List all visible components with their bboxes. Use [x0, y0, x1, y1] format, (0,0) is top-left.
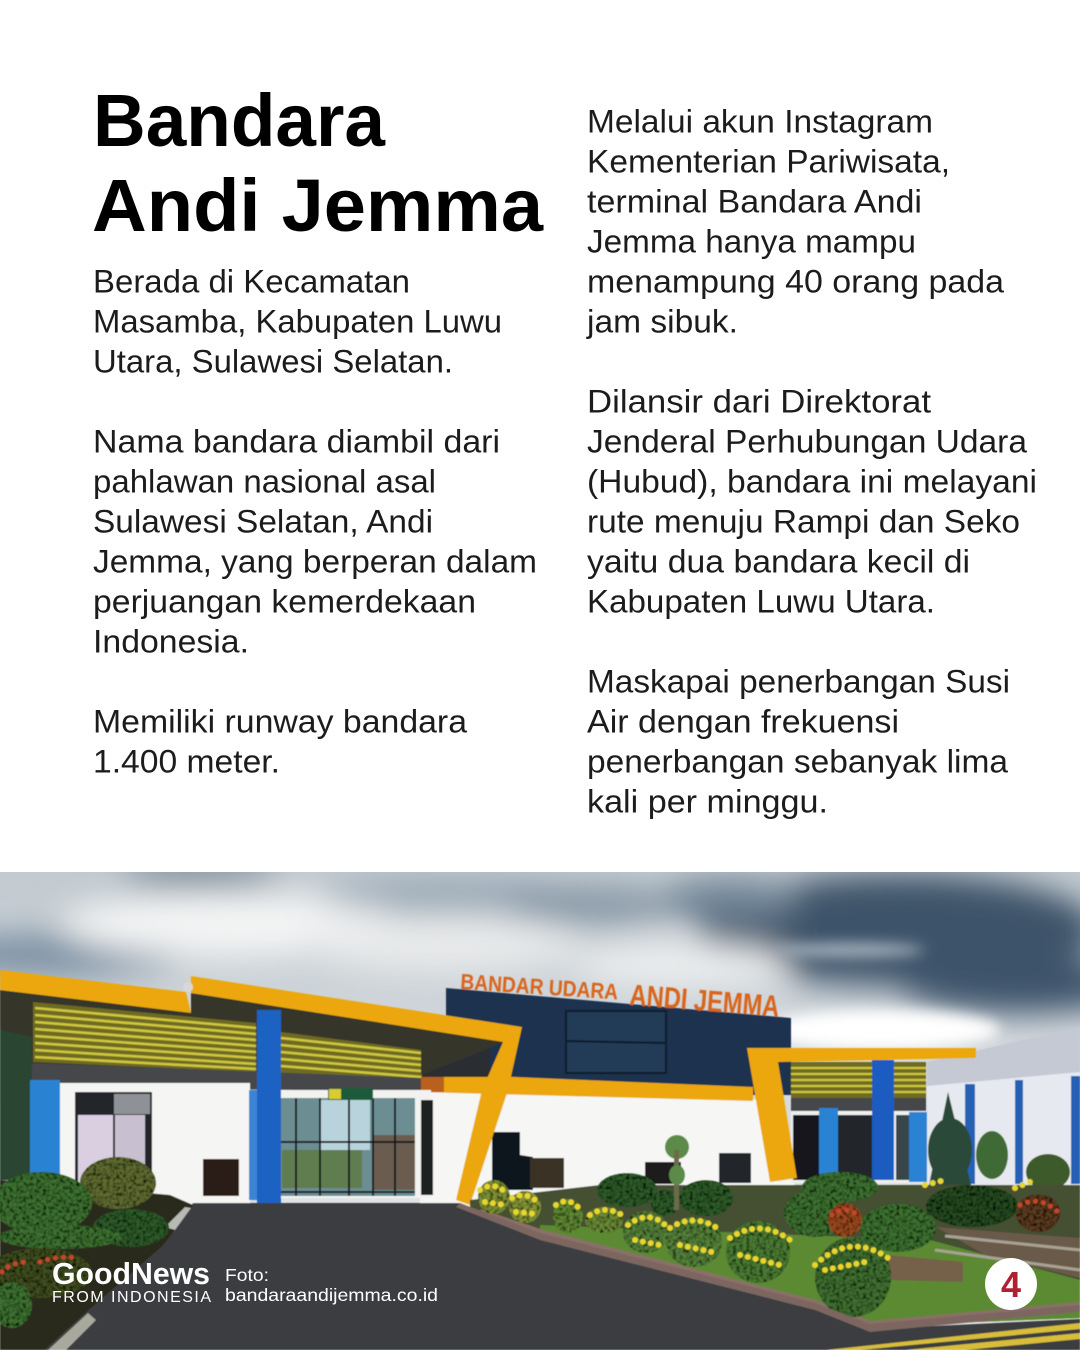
garden on the left	[0, 1157, 193, 1350]
left terminal wing	[0, 990, 510, 1205]
text block: right column: Kementerian Pariwisata,	[587, 144, 950, 180]
photo credit: bandaraandijemma.co.id	[225, 1285, 438, 1305]
garden beds on the right	[470, 1135, 1080, 1326]
title: Bandara	[93, 79, 386, 162]
text block: right column: rute menuju Rampi dan Seko	[587, 504, 1020, 540]
right hangar building	[927, 1027, 1080, 1200]
text block: left column: pahlawan nasional asal	[93, 464, 436, 500]
text block: left column: Indonesia.	[93, 624, 249, 660]
page number badge	[985, 1258, 1037, 1310]
title: Andi Jemma	[92, 164, 544, 247]
photo credit: Foto:	[225, 1265, 269, 1285]
text block: left column: Memiliki runway bandara	[93, 704, 467, 740]
text block: right column: Air dengan frekuensi	[587, 704, 899, 740]
text block: right column: Maskapai penerbangan Susi	[587, 664, 1010, 700]
main white wall	[420, 1040, 800, 1210]
text block: right column: yaitu dua bandara kecil di	[587, 544, 970, 580]
text block: right column: Jemma hanya mampu	[587, 224, 916, 260]
text block: left column: Sulawesi Selatan, Andi	[93, 504, 433, 540]
text block: left column: 1.400 meter.	[93, 744, 280, 780]
page background	[0, 0, 1080, 872]
sign lettering: ANDI JEMMA	[628, 979, 781, 1024]
footer logo: GoodNews	[52, 1256, 210, 1291]
text block: right column: penerbangan sebanyak lima	[587, 744, 1008, 780]
text block: right column: (Hubud), bandara ini melayani	[587, 464, 1037, 500]
footer logo: FROM INDONESIA	[52, 1289, 211, 1306]
text block: right column: Dilansir dari Direktorat	[587, 384, 931, 420]
text block: right column: jam sibuk.	[586, 304, 738, 340]
text block: right column: Kabupaten Luwu Utara.	[587, 584, 935, 620]
sign lettering	[460, 973, 779, 1018]
text block: right column: menampung 40 orang pada	[587, 264, 1004, 300]
text block: right column: Jenderal Perhubungan Udara	[587, 424, 1027, 460]
sky with clouds	[0, 863, 1080, 1350]
text block: left column: Masamba, Kabupaten Luwu	[93, 304, 502, 340]
text block: right column: Melalui akun Instagram	[587, 104, 933, 140]
text block: right column	[586, 104, 1037, 820]
yellow roof and leg	[0, 970, 522, 1205]
text block: right column: terminal Bandara Andi	[587, 184, 922, 220]
navy sign block	[446, 988, 791, 1095]
footer logo	[53, 1262, 211, 1302]
text block: left column: Utara, Sulawesi Selatan.	[93, 344, 453, 380]
right canopy	[747, 1048, 976, 1183]
text block: left column: Jemma, yang berperan dalam	[93, 544, 537, 580]
text block: left column: perjuangan kemerdekaan	[93, 584, 476, 620]
sign lettering: BANDAR UDARA	[460, 969, 619, 1004]
text block: left column: Nama bandara diambil dari	[93, 424, 500, 460]
page number badge: 4	[1001, 1264, 1021, 1305]
title	[92, 79, 544, 247]
photo: airport terminal	[0, 863, 1080, 1350]
background tree left	[0, 990, 34, 1180]
text block: left column: Berada di Kecamatan	[93, 264, 410, 300]
asphalt driveway	[45, 1203, 1080, 1350]
photo credit	[226, 1269, 437, 1304]
text block: left column	[93, 264, 537, 780]
text block: right column: kali per minggu.	[587, 784, 828, 820]
